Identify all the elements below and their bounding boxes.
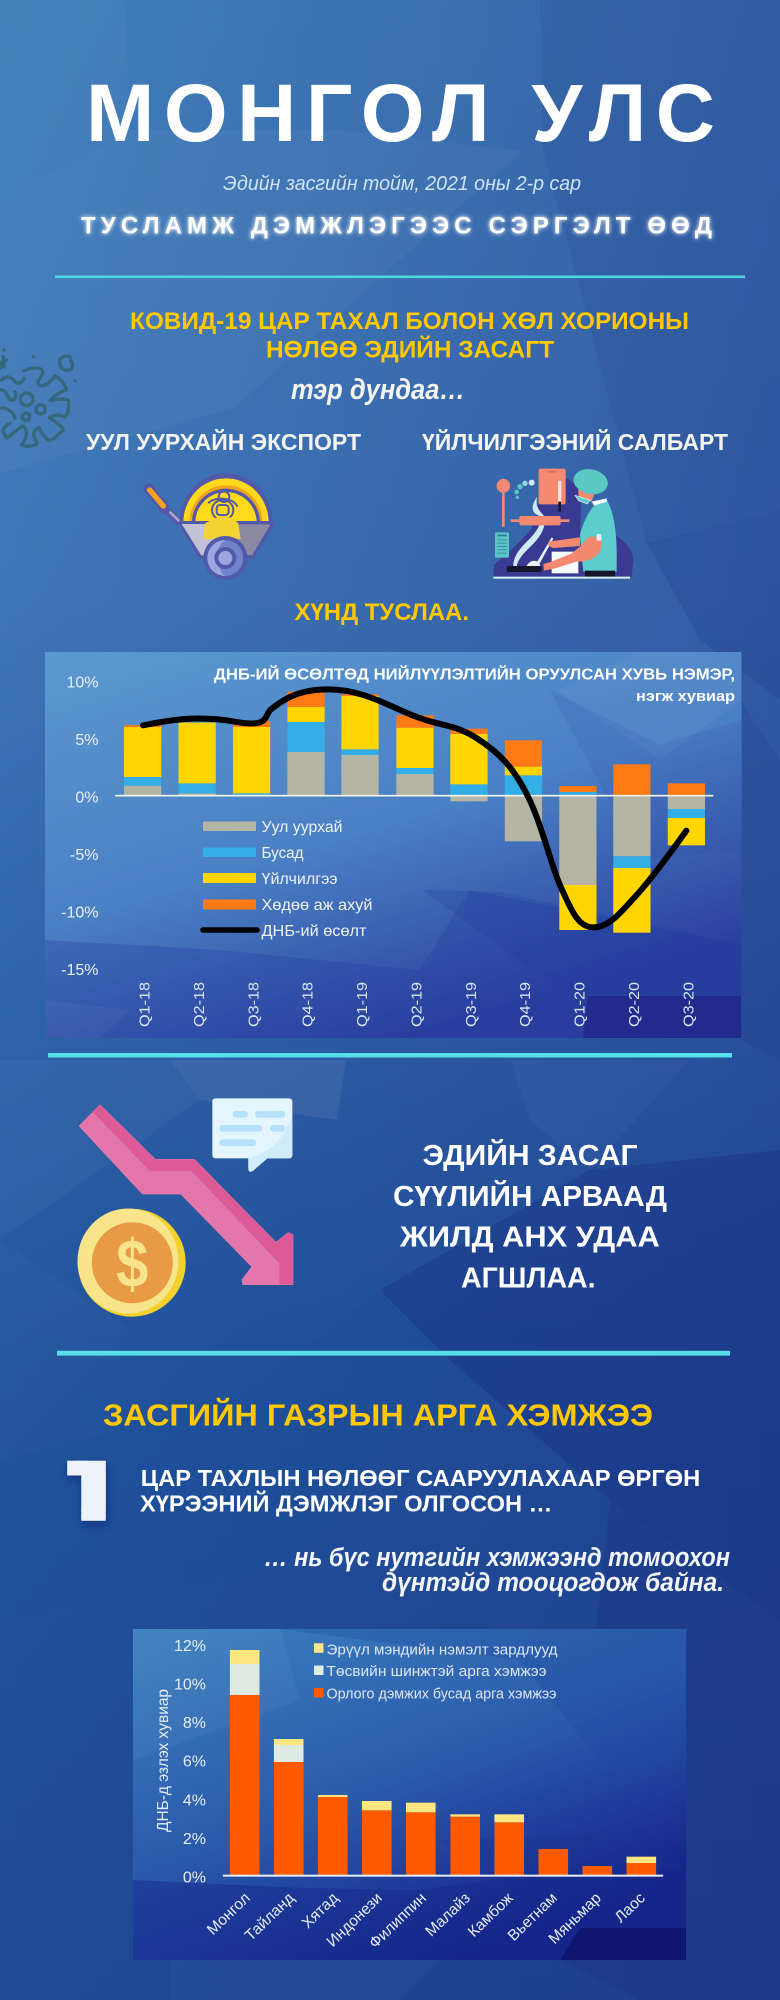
icon: speech bubble bbox=[212, 1098, 292, 1172]
chart legend: ДНБ-ий өсөлт bbox=[262, 923, 366, 940]
y axis labels: -5% bbox=[70, 847, 98, 864]
icon: falling arrow bbox=[80, 1106, 292, 1284]
text: among them: тэр дундаа… bbox=[291, 374, 465, 406]
x axis quarter labels bbox=[136, 982, 698, 1027]
numeral 1 bbox=[66, 1460, 110, 1528]
x axis quarter labels: Q4-18 bbox=[300, 982, 316, 1027]
text: broad support: ЦАР ТАХЛЫН НӨЛӨӨГ СААРУУЛАХААР ӨРГӨН bbox=[141, 1465, 700, 1491]
panel: fiscal support by country chart bbox=[133, 1629, 686, 1960]
x axis quarter labels: Q3-18 bbox=[246, 982, 262, 1027]
x axis quarter labels: Q2-19 bbox=[408, 982, 426, 1027]
y axis labels: 10% bbox=[66, 674, 98, 692]
x axis quarter labels: Q4-19 bbox=[517, 982, 534, 1027]
text: economy contracted: ЭДИЙН ЗАСАГ bbox=[422, 1138, 638, 1172]
icon: mining wheelbarrow bbox=[149, 473, 273, 580]
glowing tagline: ТУСЛАМЖ ДЭМЖЛЭГЭЭС СЭРГЭЛТ ӨӨД bbox=[81, 212, 712, 240]
heading: government measures: ЗАСГИЙН ГАЗРЫН АРГА ХЭМЖЭЭ bbox=[103, 1397, 653, 1433]
x axis country labels: Филиппин bbox=[366, 1890, 430, 1952]
numeral 1: 1 bbox=[56, 1427, 131, 1542]
icon: dollar coin: $ bbox=[116, 1226, 148, 1302]
heading: covid impact: КОВИД-19 ЦАР ТАХАЛ БОЛОН ХӨЛ ХОРИОНЫ bbox=[130, 308, 689, 335]
y axis labels: 8% bbox=[183, 1715, 206, 1732]
x axis country labels: Мяньмар bbox=[546, 1890, 605, 1948]
chart legend: Эрүүл мэндийн нэмэлт зардлууд bbox=[326, 1642, 558, 1658]
x axis country labels: Вьетнам bbox=[505, 1890, 561, 1945]
x axis quarter labels: Q3-19 bbox=[463, 982, 480, 1027]
text: heavily hit: ХҮНД ТУСЛАА. bbox=[294, 599, 469, 626]
y axis title: ДНБ-д эзлэх хувиар bbox=[155, 1689, 172, 1832]
chart legend: Бусад bbox=[262, 845, 304, 862]
panel: GDP growth contribution chart bbox=[45, 652, 742, 1038]
heading: covid impact bbox=[130, 308, 689, 364]
text: economy contracted: АГШЛАА. bbox=[461, 1263, 596, 1295]
GDP growth line bbox=[143, 689, 686, 927]
y axis labels: 4% bbox=[183, 1792, 206, 1810]
text: regional comparison: дүнтэйд тооцогдож байна. bbox=[382, 1569, 724, 1597]
text: economy contracted: СҮҮЛИЙН АРВААД bbox=[393, 1179, 667, 1213]
label: services sector: ҮЙЛЧИЛГЭЭНИЙ САЛБАРТ bbox=[422, 428, 728, 455]
stacked bars bbox=[223, 1650, 663, 1877]
y axis labels bbox=[174, 1638, 206, 1886]
chart legend: Орлого дэмжих бусад арга хэмжээ bbox=[326, 1686, 556, 1702]
y axis labels: -10% bbox=[61, 904, 98, 922]
x axis country labels: Индонези bbox=[324, 1890, 386, 1950]
y axis labels: 2% bbox=[183, 1831, 206, 1848]
text: regional comparison: … нь бүс нутгийн хэмжээнд томоохон bbox=[264, 1544, 730, 1572]
x axis quarter labels: Q1-19 bbox=[354, 982, 371, 1027]
text: broad support bbox=[140, 1465, 700, 1517]
y axis labels: 6% bbox=[183, 1754, 206, 1770]
subtitle: Эдийн засгийн тойм, 2021 оны 2-р сар bbox=[223, 173, 581, 195]
x axis country labels: Хятад bbox=[299, 1890, 342, 1932]
x axis country labels: Малайз bbox=[422, 1890, 474, 1940]
heading: covid impact: НӨЛӨӨ ЭДИЙН ЗАСАГТ bbox=[266, 336, 554, 364]
icon: virus decoration bbox=[0, 348, 77, 446]
chart legend: Хөдөө аж ахуй bbox=[262, 897, 372, 914]
chart legend bbox=[203, 819, 372, 940]
x axis country labels: Монгол bbox=[204, 1890, 254, 1939]
text: economy contracted bbox=[393, 1138, 667, 1295]
y axis labels: 0% bbox=[75, 790, 98, 806]
y axis labels bbox=[61, 674, 98, 979]
chart legend: Үйлчилгээ bbox=[262, 871, 338, 888]
y axis labels: -15% bbox=[61, 962, 98, 979]
x axis country labels bbox=[204, 1889, 649, 1952]
x axis country labels: Тайланд bbox=[242, 1890, 298, 1944]
x axis quarter labels: Q3-20 bbox=[680, 982, 698, 1027]
y axis labels: 10% bbox=[174, 1676, 206, 1694]
text: economy contracted: ЖИЛД АНХ УДАА bbox=[399, 1222, 660, 1254]
x axis quarter labels: Q2-20 bbox=[626, 982, 643, 1027]
text: broad support: ХҮРЭЭНИЙ ДЭМЖЛЭГ ОЛГОСОН … bbox=[140, 1490, 552, 1517]
chart legend: Төсвийн шинжтэй арга хэмжээ bbox=[326, 1664, 546, 1680]
y axis labels: 5% bbox=[75, 732, 98, 749]
x axis country labels: Лаос bbox=[612, 1889, 649, 1926]
y axis labels: 0% bbox=[183, 1870, 206, 1886]
x axis country labels: Камбож bbox=[465, 1889, 517, 1941]
icon: dollar coin bbox=[78, 1208, 186, 1317]
label: mining export: УУЛ УУРХАЙН ЭКСПОРТ bbox=[86, 428, 361, 455]
x axis quarter labels: Q1-20 bbox=[572, 982, 588, 1027]
chart legend bbox=[314, 1642, 558, 1702]
chart title: ДНБ-ИЙ ӨСӨЛТӨД НИЙЛҮҮЛЭЛТИЙН ОРУУЛСАН ХУВЬ НЭМЭР, bbox=[214, 664, 735, 684]
x axis quarter labels: Q2-18 bbox=[191, 982, 208, 1027]
y axis labels: 12% bbox=[174, 1638, 206, 1655]
stacked bars bbox=[115, 692, 713, 933]
title: МОНГОЛ УЛС bbox=[86, 68, 715, 159]
chart title: нэгж хувиар bbox=[636, 688, 735, 705]
chart legend: Уул уурхай bbox=[262, 819, 342, 836]
icon: cook in kitchen bbox=[493, 466, 633, 579]
text: regional comparison bbox=[264, 1544, 730, 1597]
x axis quarter labels: Q1-18 bbox=[136, 982, 154, 1027]
chart title bbox=[214, 664, 735, 705]
